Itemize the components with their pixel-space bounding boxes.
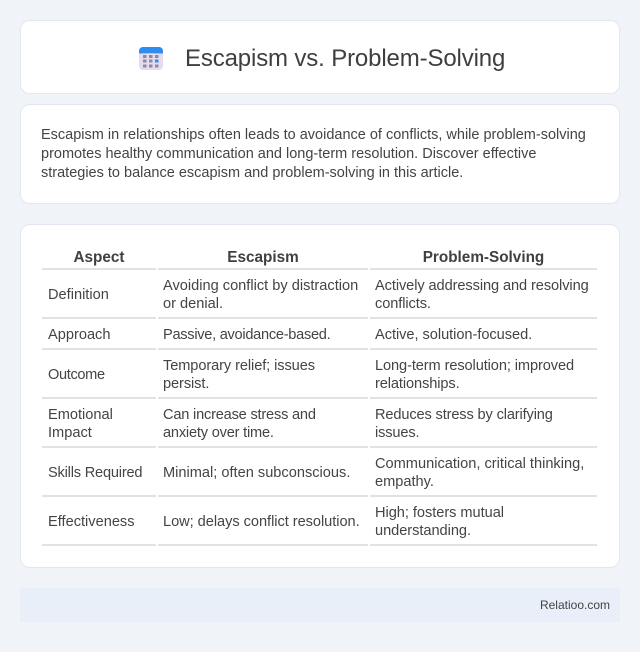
comparison table: High; fosters mutual xyxy=(375,505,504,521)
row: Approach: Approach xyxy=(48,327,110,343)
comparison table: conflicts. xyxy=(375,296,431,312)
intro text xyxy=(41,127,586,181)
comparison table: Communication, critical thinking, xyxy=(375,456,584,472)
footer credit: Relatioo.com xyxy=(540,598,610,612)
row: Emotional Impact: Emotional xyxy=(48,407,113,423)
comparison table: Long-term resolution; improved xyxy=(375,358,574,374)
comparison table: Temporary relief; issues xyxy=(163,358,315,374)
icon: calendar xyxy=(139,47,163,70)
panel: introduction xyxy=(20,104,620,204)
row: Emotional Impact xyxy=(48,407,113,441)
comparison table: or denial. xyxy=(163,296,223,312)
panel: title card xyxy=(20,20,620,94)
intro text: Escapism in relationships often leads to avoidance of conflicts, while problem-solving xyxy=(41,127,586,143)
row: Definition: Definition xyxy=(48,287,109,303)
comparison table: empathy. xyxy=(375,474,434,490)
row: Skills Required: Skills Required xyxy=(48,465,142,481)
comparison table: Actively addressing and resolving xyxy=(375,278,589,294)
comparison table: Minimal; often subconscious. xyxy=(163,465,350,481)
header: Escapism: Escapism xyxy=(227,249,299,266)
comparison table: Low; delays conflict resolution. xyxy=(163,514,360,530)
comparison table: Can increase stress and xyxy=(163,407,316,423)
row: Emotional Impact: Impact xyxy=(48,425,92,441)
comparison table: understanding. xyxy=(375,523,471,539)
comparison table: Passive, avoidance-based. xyxy=(163,327,330,343)
comparison table: issues. xyxy=(375,425,419,441)
header: Problem-Solving: Problem-Solving xyxy=(423,249,544,266)
comparison table: relationships. xyxy=(375,376,460,392)
comparison table: persist. xyxy=(163,376,209,392)
comparison table: Active, solution-focused. xyxy=(375,327,532,343)
comparison table: anxiety over time. xyxy=(163,425,274,441)
comparison table: Avoiding conflict by distraction xyxy=(163,278,358,294)
intro text: strategies to balance escapism and problem-solving in this article. xyxy=(41,165,463,181)
comparison table: Reduces stress by clarifying xyxy=(375,407,553,423)
intro text: promotes healthy communication and long-term resolution. Discover effective xyxy=(41,146,536,162)
panel: comparison table xyxy=(20,224,620,568)
row: Outcome: Outcome xyxy=(48,367,105,383)
row: Effectiveness: Effectiveness xyxy=(48,514,135,530)
comparison table xyxy=(42,249,597,546)
title: Escapism vs. Problem-Solving xyxy=(185,45,505,72)
header: Aspect: Aspect xyxy=(73,249,124,266)
footer bar xyxy=(20,588,620,622)
